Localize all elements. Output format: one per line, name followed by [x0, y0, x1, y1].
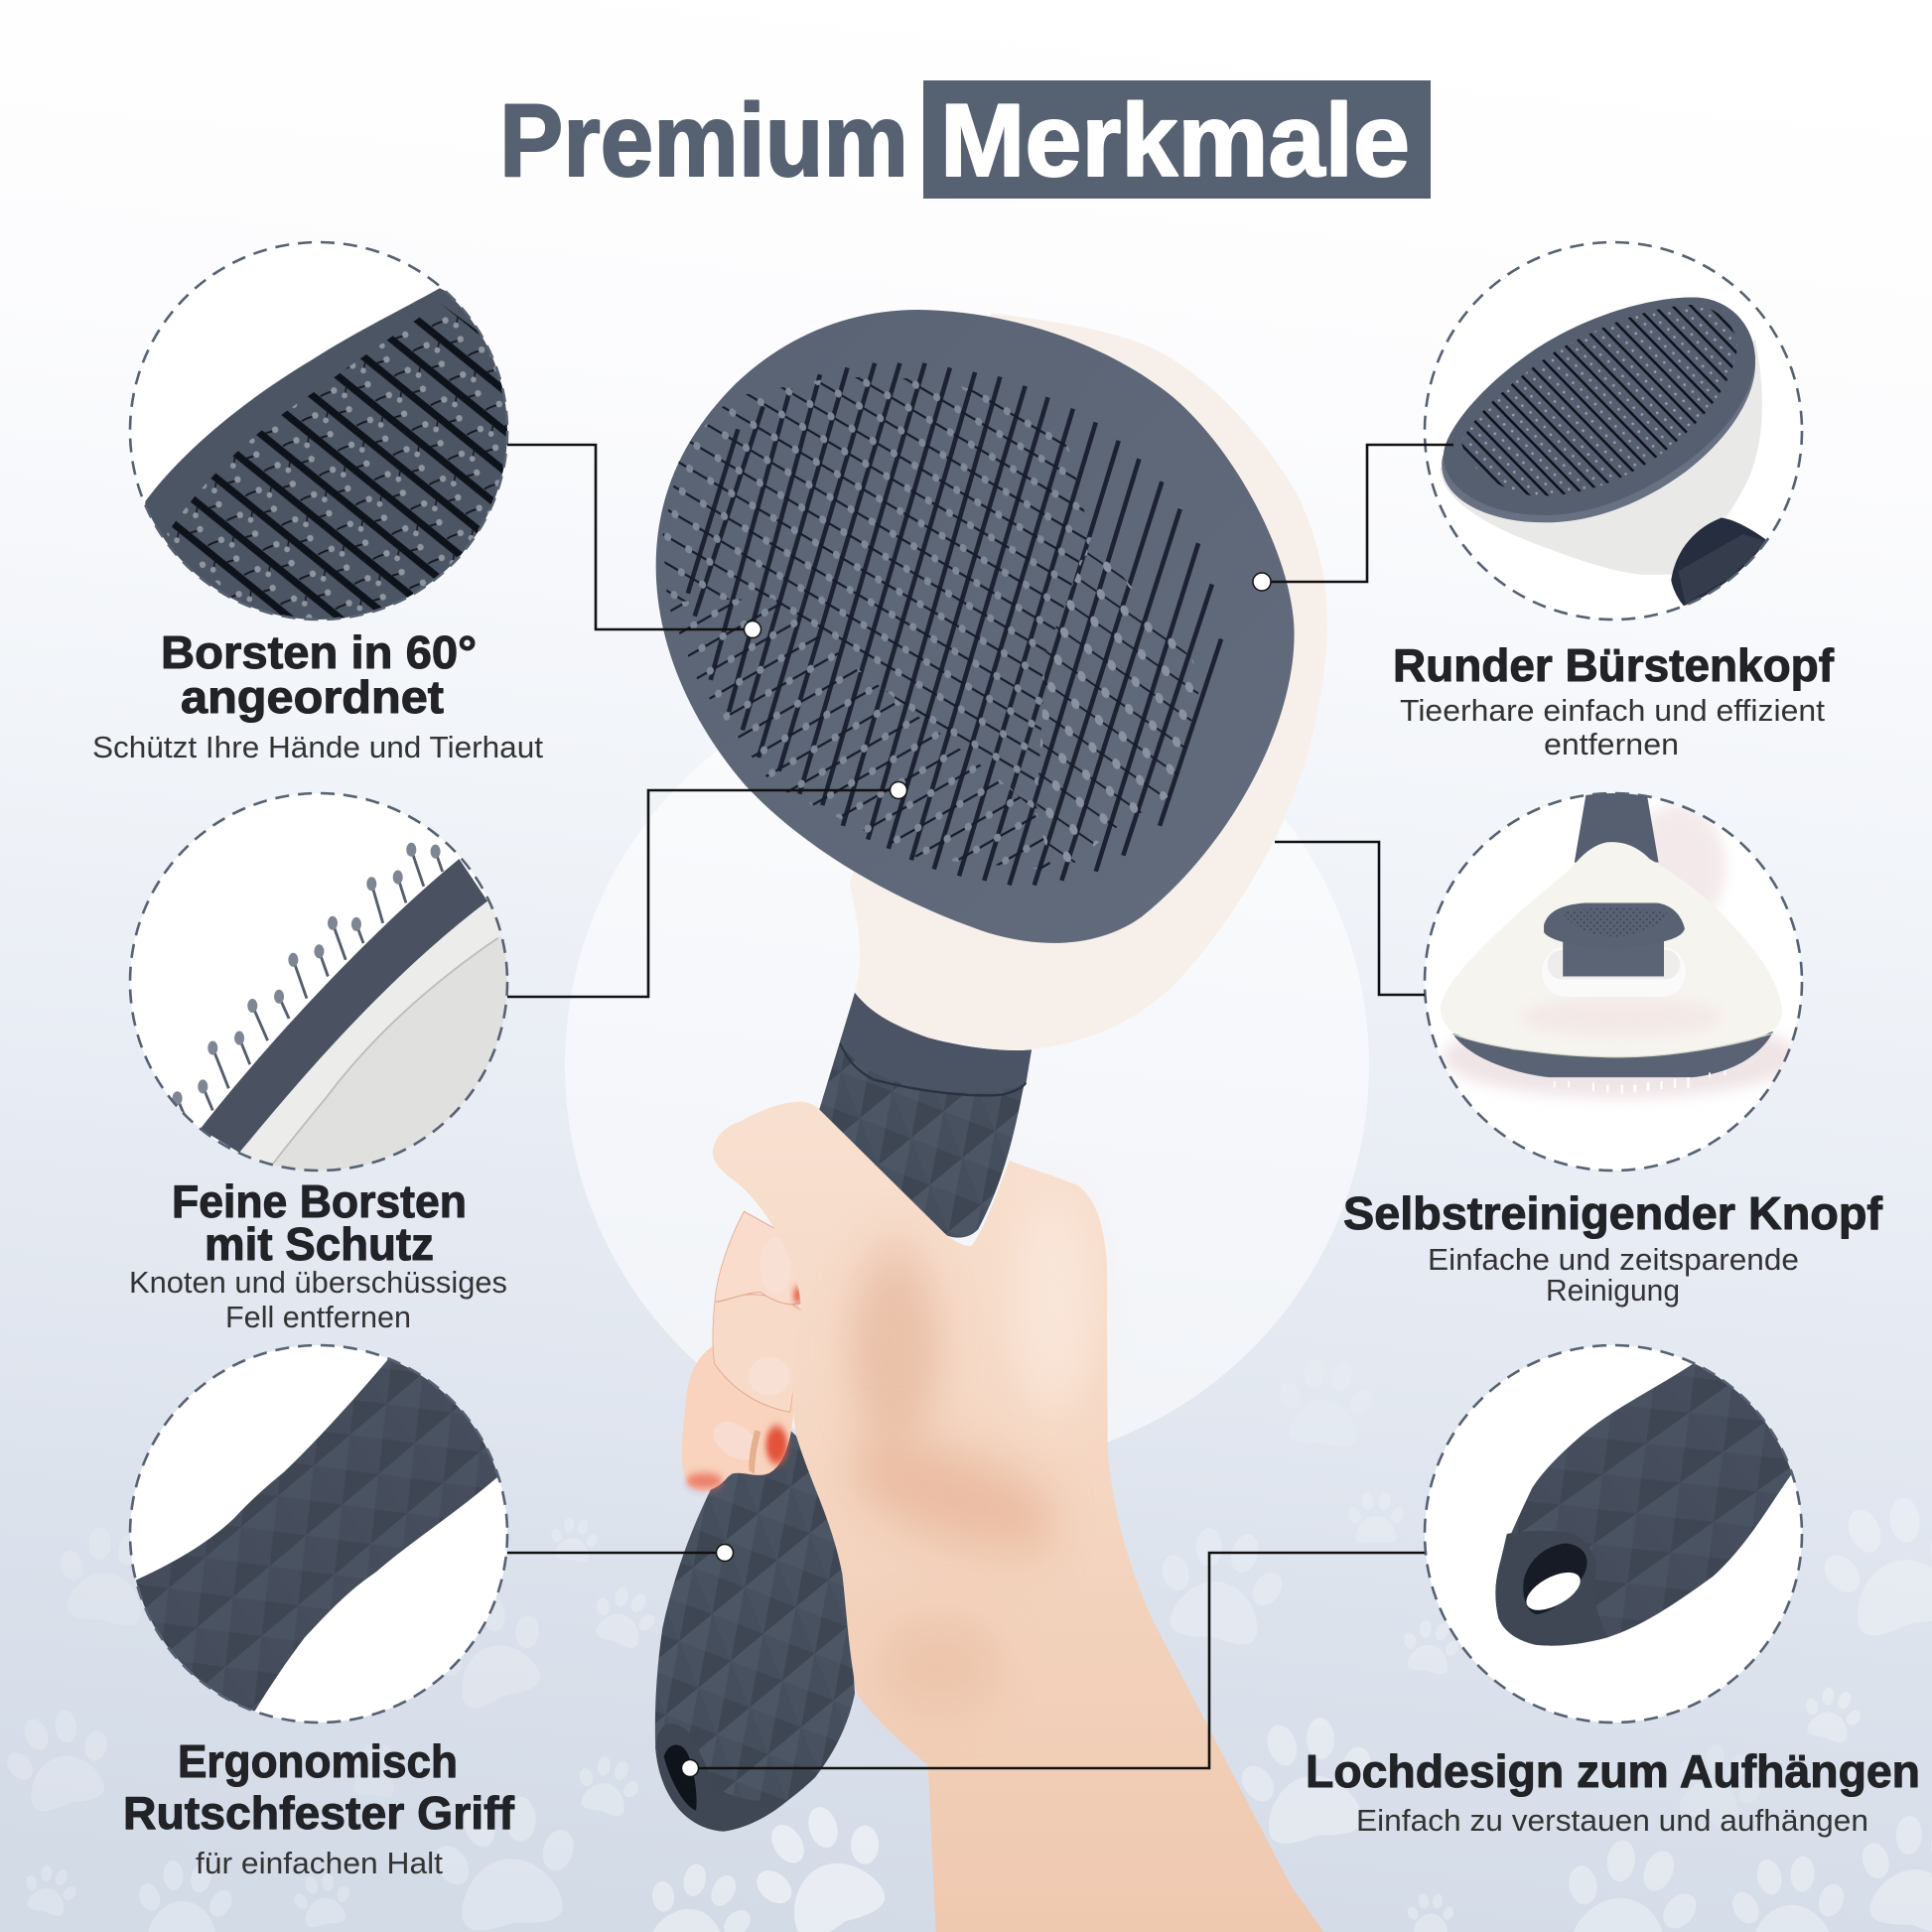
brush head — [653, 310, 1327, 1052]
label: Runder Bürstenkopf — [1393, 639, 1835, 761]
inset: ergonomic grip — [99, 1330, 525, 1752]
label: Feine Borsten mit Schutz: Knoten und überschüssiges — [129, 1265, 507, 1300]
label: Ergonomisch Rutschfester Griff: für einfachen Halt — [196, 1846, 443, 1880]
callout line: round head — [1253, 445, 1453, 591]
callout line: self-cleaning button — [1275, 842, 1425, 995]
callout line: fine bristles — [507, 782, 907, 997]
label: Feine Borsten mit Schutz: mit Schutz — [205, 1218, 434, 1270]
label: Lochdesign zum Aufhängen — [1306, 1745, 1920, 1838]
callout line: grip — [507, 1545, 733, 1561]
title: Premium — [499, 83, 908, 199]
callout line: hanging hole — [681, 1553, 1425, 1777]
label: Selbstreinigender Knopf: Selbstreinigender Knopf — [1343, 1187, 1883, 1239]
label: Feine Borsten mit Schutz: Fell entfernen — [225, 1300, 411, 1334]
brush handle — [655, 993, 1032, 1832]
label: Ergonomisch Rutschfester Griff: Ergonomisch — [178, 1735, 458, 1787]
inset: self-cleaning button — [1425, 789, 1802, 1171]
inset: fine bristles with protection — [130, 793, 525, 1185]
label: Lochdesign zum Aufhängen: Einfach zu verstauen und aufhängen — [1356, 1803, 1868, 1838]
inset: bristles at 60 degrees — [129, 240, 508, 621]
label: Ergonomisch Rutschfester Griff — [123, 1735, 515, 1880]
background paw prints — [0, 1354, 1932, 1932]
label: Ergonomisch Rutschfester Griff: Rutschfester Griff — [123, 1787, 515, 1839]
label: Lochdesign zum Aufhängen: Lochdesign zum Aufhängen — [1306, 1745, 1920, 1797]
label: Runder Bürstenkopf: Runder Bürstenkopf — [1393, 639, 1835, 691]
label: Runder Bürstenkopf: Tieerhare einfach und effizient — [1400, 693, 1825, 728]
callout line: angled bristles — [507, 445, 760, 637]
inset: hanging hole — [1425, 1330, 1832, 1723]
label: Runder Bürstenkopf: entfernen — [1544, 727, 1679, 761]
label: Borsten in 60 Grad: Schützt Ihre Hände und Tierhaut — [92, 730, 543, 764]
label: Borsten in 60 Grad: angeordnet — [181, 671, 444, 723]
label: Feine Borsten mit Schutz: Feine Borsten — [172, 1175, 467, 1227]
label: Selbstreinigender Knopf: Reinigung — [1546, 1273, 1680, 1308]
hand — [682, 1102, 1329, 1932]
label: Selbstreinigender Knopf: Einfache und zeitsparende — [1428, 1242, 1799, 1277]
label: Borsten in 60 Grad: Borsten in 60° — [161, 626, 477, 678]
label: Borsten in 60 Grad — [92, 626, 543, 764]
title — [499, 80, 1431, 199]
label: Feine Borsten mit Schutz — [129, 1175, 507, 1334]
large pale background circle — [565, 663, 1369, 1467]
brush with hand — [653, 310, 1329, 1932]
title: Merkmale — [940, 83, 1410, 199]
inset: round brush head — [1425, 242, 1802, 620]
label: Selbstreinigender Knopf — [1343, 1187, 1883, 1308]
